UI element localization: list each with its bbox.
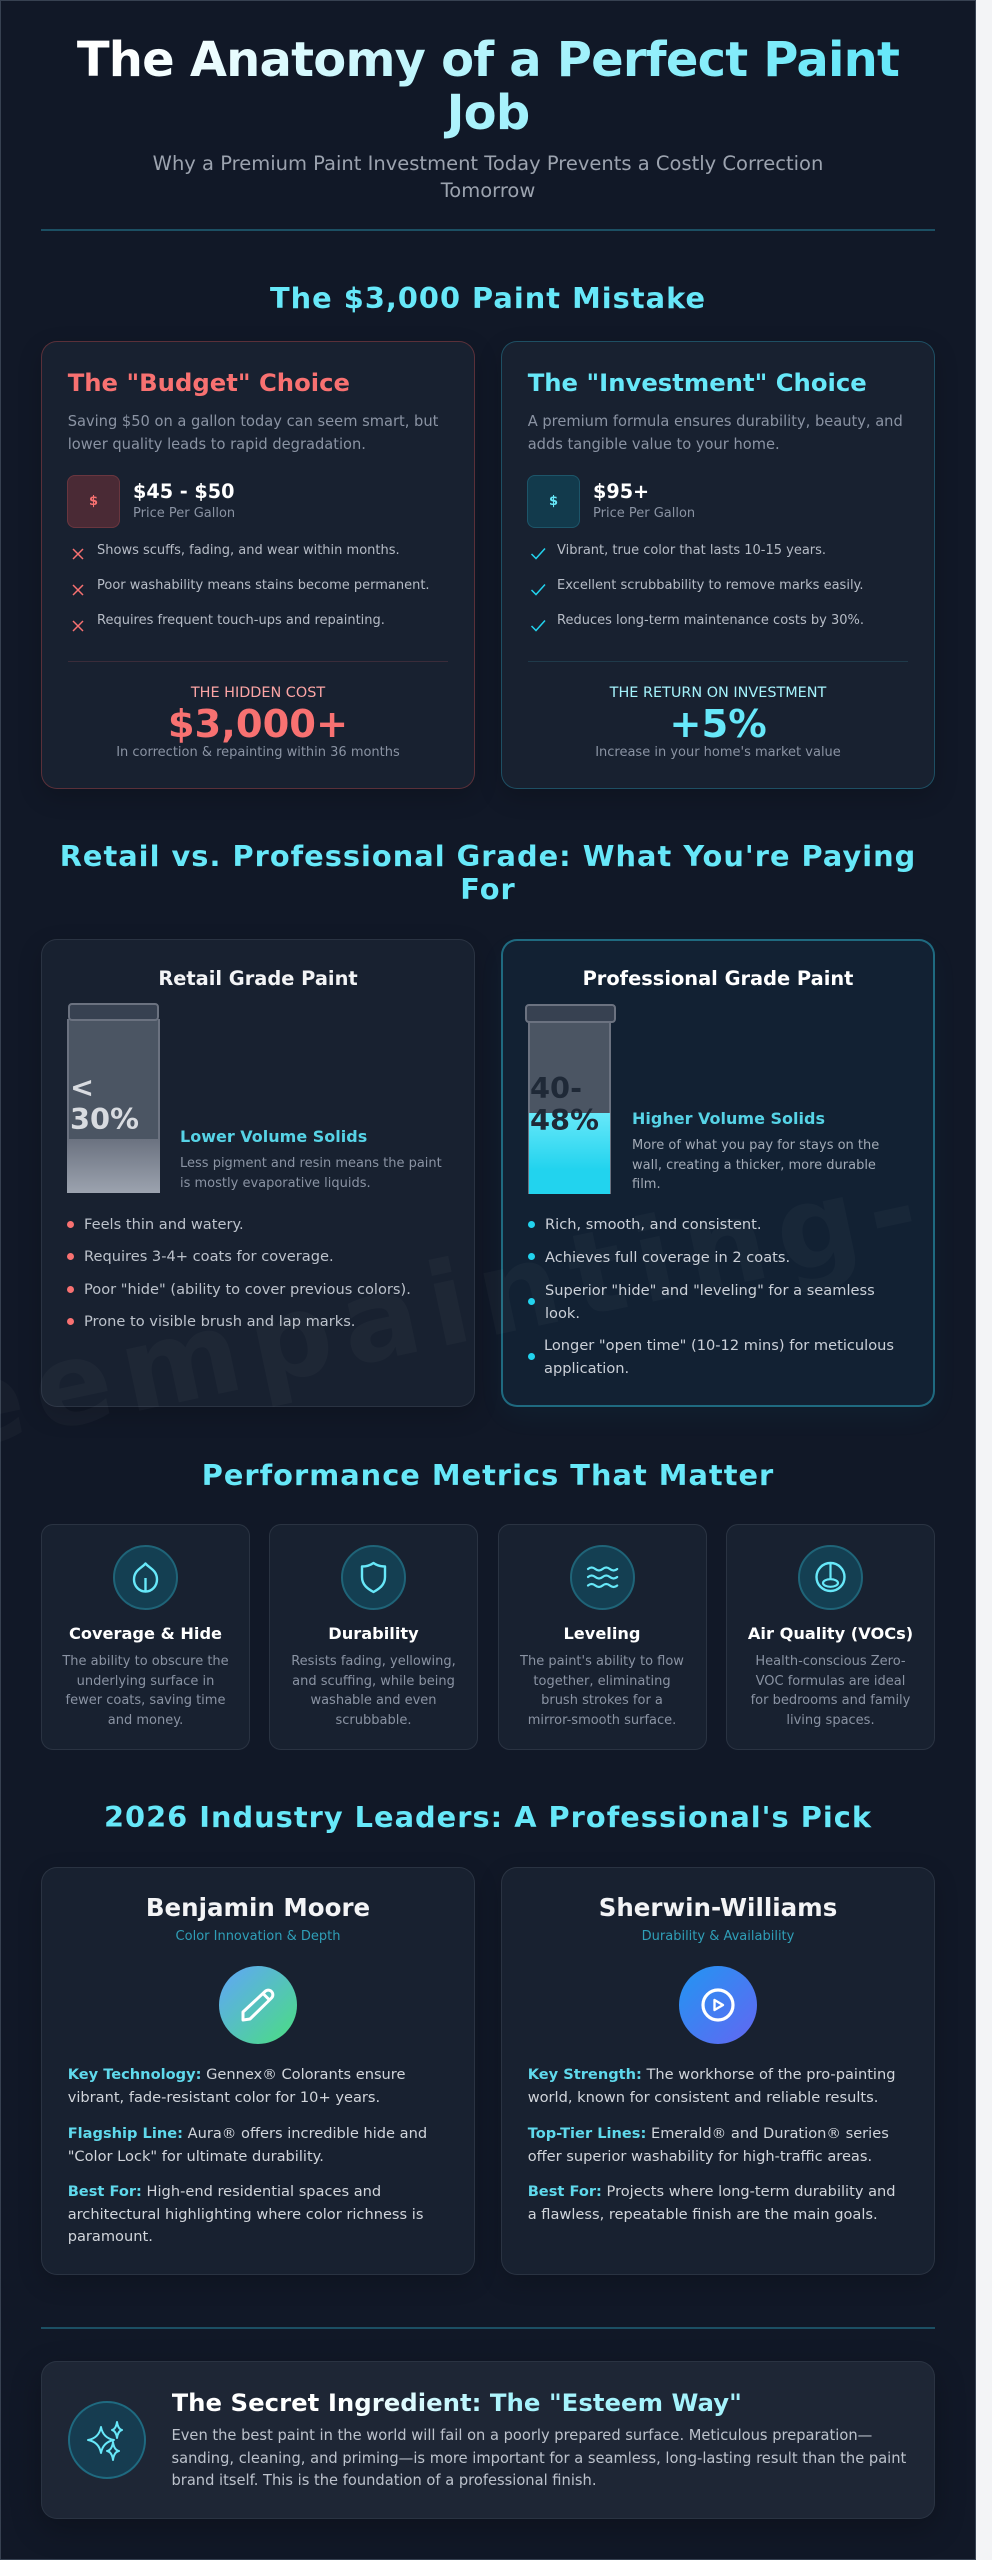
retail solids description	[180, 1156, 442, 1191]
retail solids description: Less pigment and resin means the paint	[180, 1156, 442, 1171]
metric description: together, eliminating	[533, 1674, 671, 1689]
icon: dollar	[67, 475, 120, 528]
trait text: Requires 3-4+ coats for coverage.	[84, 1248, 334, 1265]
metric description: brush strokes for a	[541, 1693, 663, 1708]
title	[41, 34, 935, 140]
title: The Anatomy of a Perfect Paint	[77, 32, 899, 88]
bullet	[528, 1353, 535, 1360]
retail solids value	[70, 1070, 139, 1136]
metric description: fewer coats, saving time	[66, 1693, 225, 1708]
heading: performance metrics: Performance Metrics That Matter	[202, 1458, 774, 1492]
benefit text: Reduces long-term maintenance costs by 30%.	[557, 613, 864, 628]
icon: waves	[570, 1545, 635, 1610]
professional heading: Professional Grade Paint	[583, 967, 853, 990]
list: professional traits	[528, 1216, 894, 1377]
brand tagline: Color Innovation & Depth	[176, 1929, 340, 1944]
subtitle: Tomorrow	[441, 179, 535, 202]
icon: check	[531, 584, 546, 596]
trait text: Achieves full coverage in 2 coats.	[545, 1249, 790, 1266]
professional solids value: 40-	[530, 1071, 582, 1105]
hidden cost label: THE HIDDEN COST	[191, 685, 325, 701]
header	[77, 32, 899, 202]
retail solids value: <	[70, 1070, 94, 1104]
panel: retail grade	[41, 939, 475, 1407]
metric description: washable and even	[310, 1693, 437, 1708]
price label: Price Per Gallon	[133, 506, 235, 521]
best for: Best For: High-end residential spaces and	[68, 2183, 381, 2200]
metric title: Leveling	[563, 1624, 641, 1643]
bullet	[528, 1253, 535, 1260]
investment description: A premium formula ensures durability, beauty, and	[528, 413, 903, 430]
budget description: Saving $50 on a gallon today can seem smart, but	[68, 413, 438, 430]
key technology: vibrant, fade-resistant color for 10+ years.	[68, 2089, 380, 2106]
top tier lines: offer superior washability for high-traffic areas.	[528, 2148, 872, 2165]
budget title: The "Budget" Choice	[68, 368, 350, 397]
chart: retail paint can	[67, 1003, 160, 1193]
professional solids description: wall, creating a thicker, more durable	[632, 1158, 876, 1172]
callout title: The Secret Ingredient: The "Esteem Way"	[172, 2388, 742, 2417]
metric description: mirror-smooth surface.	[528, 1713, 676, 1728]
icon: shield	[341, 1545, 406, 1610]
metric description: The ability to obscure the	[62, 1654, 229, 1669]
icon: dollar	[527, 475, 580, 528]
budget price: $45 - $50	[133, 480, 234, 503]
icon: check	[531, 548, 546, 560]
icon: check	[531, 620, 546, 632]
metric description: Resists fading, yellowing,	[291, 1654, 456, 1669]
chart: professional paint can	[525, 1004, 616, 1194]
return label: THE RETURN ON INVESTMENT	[610, 685, 826, 701]
trait text: Superior "hide" and "leveling" for a seamless	[545, 1282, 875, 1299]
heading: retail vs professional: For	[460, 872, 516, 906]
professional solids heading: Higher Volume Solids	[632, 1109, 825, 1128]
professional solids description: More of what you pay for stays on the	[632, 1138, 879, 1153]
icon: pencil	[219, 1966, 297, 2044]
icon: leaf drop	[113, 1545, 178, 1610]
brand tagline: Durability & Availability	[642, 1929, 794, 1944]
trait text	[545, 1282, 875, 1322]
hidden cost note: In correction & repainting within 36 months	[116, 745, 400, 760]
professional solids description: film.	[632, 1177, 661, 1192]
bullet	[67, 1253, 74, 1260]
callout text: brand itself. This is the foundation of a professional finish.	[172, 2472, 596, 2489]
trait text: Feels thin and watery.	[84, 1216, 244, 1233]
investment title: The "Investment" Choice	[528, 368, 867, 397]
metric: coverage and hide	[41, 1524, 250, 1750]
key technology: Key Technology: Gennex® Colorants ensure	[68, 2066, 405, 2083]
best for: Best For: Projects where long-term durability and	[528, 2183, 896, 2200]
subtitle	[153, 152, 823, 202]
metric title: Coverage & Hide	[69, 1624, 222, 1643]
bullet	[67, 1221, 74, 1228]
bullet	[528, 1298, 535, 1305]
metric: air quality	[726, 1524, 935, 1750]
brand name: Benjamin Moore	[146, 1893, 370, 1922]
top tier lines	[528, 2125, 889, 2165]
price label: Price Per Gallon	[593, 506, 695, 521]
flagship line	[68, 2125, 427, 2165]
investment description	[528, 413, 903, 453]
heading: industry leaders: 2026 Industry Leaders: A Professional's Pick	[104, 1800, 872, 1834]
title: Job	[447, 85, 529, 141]
bullet	[528, 1221, 535, 1228]
return note: Increase in your home's market value	[595, 745, 841, 760]
callout text	[172, 2427, 906, 2489]
heading: retail vs professional: Retail vs. Professional Grade: What You're Paying	[60, 839, 916, 873]
metric description	[291, 1654, 456, 1728]
list: retail traits	[67, 1216, 411, 1330]
callout text: sanding, cleaning, and priming—is more important for a seamless, long-lasting result than the paint	[172, 2450, 906, 2467]
list: budget drawbacks	[72, 543, 430, 632]
icon: cross	[72, 620, 84, 632]
professional solids value: 48%	[530, 1103, 599, 1137]
retail solids description: is mostly evaporative liquids.	[180, 1176, 371, 1191]
panel: budget choice	[41, 341, 475, 789]
drawback text: Shows scuffs, fading, and wear within months.	[97, 543, 400, 558]
metric description: and money.	[108, 1713, 183, 1728]
panel: Benjamin Moore	[41, 1867, 475, 2275]
icon: air gauge	[798, 1545, 863, 1610]
flagship line: Flagship Line: Aura® offers incredible hide and	[68, 2125, 427, 2142]
retail heading: Retail Grade Paint	[158, 967, 358, 990]
key technology	[68, 2066, 405, 2106]
metric description: The paint's ability to flow	[520, 1654, 684, 1669]
retail solids heading: Lower Volume Solids	[180, 1127, 367, 1146]
heading: retail vs professional	[60, 839, 916, 906]
investment price: $95+	[593, 480, 649, 503]
metric: durability	[269, 1524, 478, 1750]
icon: dollar: $	[89, 494, 98, 509]
retail solids value: 30%	[70, 1102, 139, 1136]
icon: sparkles	[68, 2401, 146, 2479]
trait text: Longer "open time" (10-12 mins) for meticulous	[544, 1337, 894, 1354]
best for: a flawless, repeatable finish are the main goals.	[528, 2206, 878, 2223]
best for: paramount.	[68, 2228, 153, 2245]
icon: cross	[72, 584, 84, 596]
investment description: adds tangible value to your home.	[528, 436, 780, 453]
professional solids value	[530, 1071, 599, 1137]
bullet	[67, 1318, 74, 1325]
trait text	[544, 1337, 894, 1377]
panel: investment choice	[501, 341, 935, 789]
metric description: scrubbable.	[336, 1713, 411, 1728]
metric description	[520, 1654, 684, 1728]
metric: leveling	[498, 1524, 706, 1750]
metric description	[62, 1654, 229, 1728]
trait text: Rich, smooth, and consistent.	[545, 1216, 762, 1233]
best for	[528, 2183, 896, 2223]
benefit text: Excellent scrubbability to remove marks easily.	[557, 578, 864, 593]
budget description: lower quality leads to rapid degradation.	[68, 436, 366, 453]
metric title: Air Quality (VOCs)	[748, 1624, 913, 1643]
metric description: underlying surface in	[77, 1674, 214, 1689]
callout text: Even the best paint in the world will fail on a poorly prepared surface. Meticulous preparation—	[172, 2427, 872, 2444]
benefit text: Vibrant, true color that lasts 10-15 years.	[557, 543, 826, 558]
return value: +5%	[669, 702, 767, 747]
trait text: application.	[544, 1360, 629, 1377]
panel: professional grade	[501, 939, 935, 1407]
metric description: and scuffing, while being	[292, 1674, 455, 1689]
key strength: world, known for consistent and reliable results.	[528, 2089, 878, 2106]
trait text: Poor "hide" (ability to cover previous colors).	[84, 1281, 411, 1298]
bullet	[67, 1286, 74, 1293]
best for	[68, 2183, 423, 2245]
metric description: VOC formulas are ideal	[756, 1674, 905, 1689]
metric description: living spaces.	[786, 1713, 875, 1728]
metric title: Durability	[328, 1624, 419, 1643]
icon: cross	[72, 548, 84, 560]
budget description	[68, 413, 438, 453]
drawback text: Requires frequent touch-ups and repainting.	[97, 613, 385, 628]
trait text: look.	[545, 1305, 580, 1322]
brand name: Sherwin-Williams	[599, 1893, 837, 1922]
list: investment benefits	[531, 543, 864, 632]
heading: paint mistake: The $3,000 Paint Mistake	[270, 281, 706, 315]
key strength: Key Strength: The workhorse of the pro-painting	[528, 2066, 896, 2083]
best for: architectural highlighting where color richness is	[68, 2206, 423, 2223]
metric description	[750, 1654, 910, 1728]
trait text: Prone to visible brush and lap marks.	[84, 1313, 355, 1330]
subtitle: Why a Premium Paint Investment Today Prevents a Costly Correction	[153, 152, 823, 175]
icon: dollar: $	[549, 494, 558, 509]
metric description: for bedrooms and family	[751, 1693, 910, 1708]
flagship line: "Color Lock" for ultimate durability.	[68, 2148, 324, 2165]
icon: play circle	[679, 1966, 757, 2044]
metric description: Health-conscious Zero-	[755, 1654, 906, 1669]
panel: Sherwin-Williams	[501, 1867, 935, 2275]
callout: secret ingredient	[41, 2361, 935, 2519]
professional solids description	[632, 1138, 879, 1192]
top tier lines: Top-Tier Lines: Emerald® and Duration® series	[528, 2125, 889, 2142]
hidden cost value: $3,000+	[168, 702, 348, 747]
drawback text: Poor washability means stains become permanent.	[97, 578, 430, 593]
key strength	[528, 2066, 896, 2106]
